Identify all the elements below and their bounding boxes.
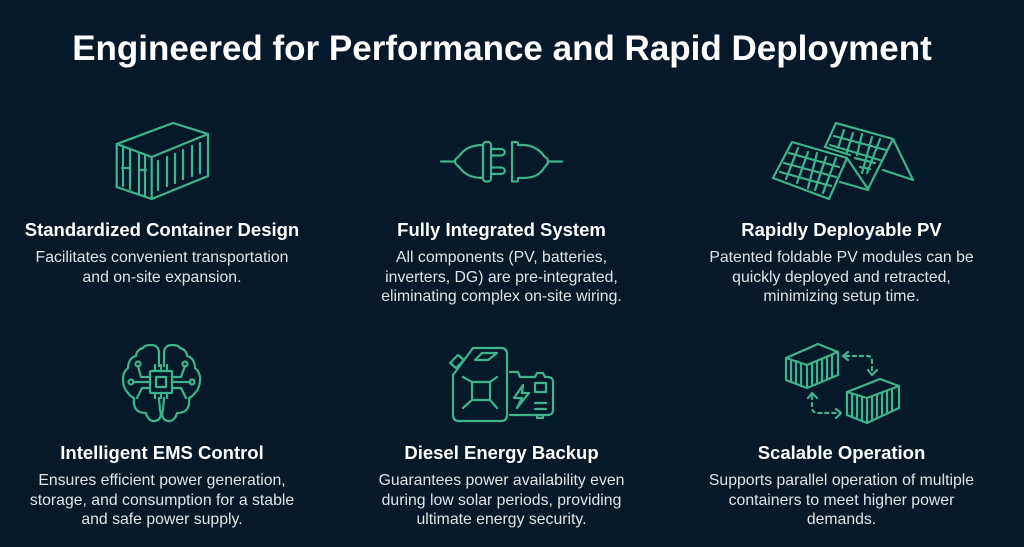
- description: All components (PV, batteries,: [396, 249, 607, 266]
- panel: scalable operation: [709, 342, 974, 528]
- panel: intelligent ems control: [30, 344, 294, 528]
- description: eliminating complex on-site wiring.: [381, 288, 622, 305]
- description: [379, 472, 624, 528]
- icon: plug and socket: [440, 140, 564, 183]
- heading: Diesel Energy Backup: [404, 442, 599, 463]
- description: ultimate energy security.: [416, 511, 587, 528]
- description: inverters, DG) are pre-integrated,: [385, 269, 618, 286]
- icon: fuel can and generator: [448, 346, 554, 422]
- description: during low solar periods, providing: [382, 492, 621, 509]
- description: Ensures efficient power generation,: [38, 472, 286, 489]
- description: Facilitates convenient transportation: [36, 249, 288, 266]
- description: [709, 472, 974, 528]
- description: [381, 249, 622, 305]
- heading: Intelligent EMS Control: [60, 442, 264, 463]
- description: and safe power supply.: [81, 511, 243, 528]
- heading: Rapidly Deployable PV: [741, 219, 942, 240]
- description: Supports parallel operation of multiple: [709, 472, 974, 489]
- description: minimizing setup time.: [763, 288, 920, 305]
- description: containers to meet higher power: [729, 492, 954, 509]
- description: [36, 249, 288, 286]
- description: quickly deployed and retracted,: [732, 269, 951, 286]
- icon: brain with chip: [122, 344, 202, 422]
- panel: standardized container design: [25, 122, 299, 286]
- description: [709, 249, 974, 305]
- description: demands.: [807, 511, 876, 528]
- description: Patented foldable PV modules can be: [709, 249, 974, 266]
- heading: Fully Integrated System: [397, 219, 606, 240]
- description: storage, and consumption for a stable: [30, 492, 294, 509]
- description: Guarantees power availability even: [379, 472, 624, 489]
- icon: two containers with arrows: [784, 342, 900, 424]
- description: [30, 472, 294, 528]
- icon: foldable solar panels: [772, 122, 914, 200]
- panel: fully integrated system: [381, 140, 622, 305]
- title: Engineered for Performance and Rapid Deployment: [72, 29, 932, 68]
- heading: Scalable Operation: [758, 442, 925, 463]
- panel: rapidly deployable pv: [709, 122, 974, 305]
- icon: shipping container: [116, 122, 210, 200]
- description: and on-site expansion.: [83, 269, 241, 286]
- heading: Standardized Container Design: [25, 219, 299, 240]
- panel: diesel energy backup: [379, 346, 624, 528]
